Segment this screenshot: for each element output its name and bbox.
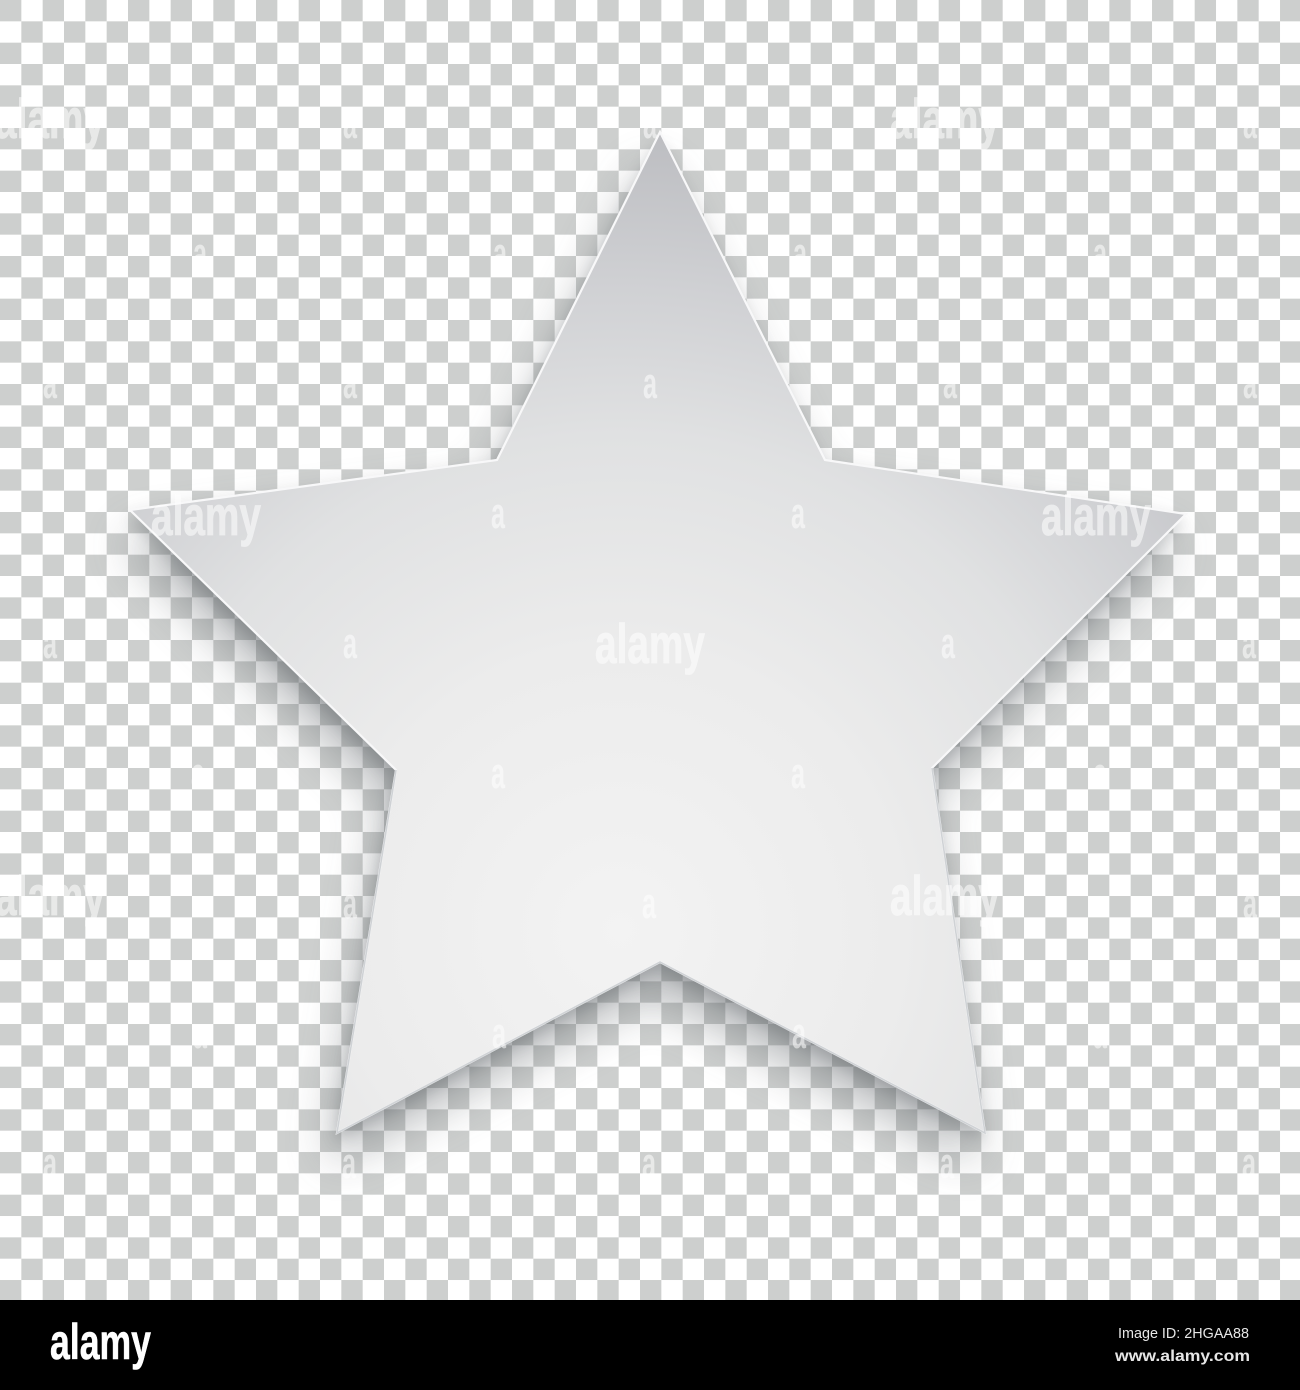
small watermark marks: a <box>491 489 505 538</box>
image id: Image ID: 2HGAA88 <box>1118 1326 1249 1342</box>
large watermarks: alamy <box>595 612 705 675</box>
website: www.alamy.com <box>1114 1348 1250 1365</box>
star soft shadow <box>122 162 1178 1163</box>
small watermark marks: a <box>343 99 357 148</box>
small watermark marks: a <box>343 879 357 928</box>
small watermark marks: a <box>940 1139 954 1188</box>
small watermark marks: a <box>343 619 357 668</box>
small watermark marks: a <box>643 359 657 408</box>
small watermark marks: a <box>791 749 805 798</box>
small watermark marks: a <box>491 749 505 798</box>
large watermarks: alamy <box>1041 484 1151 547</box>
small watermark marks: a <box>193 1009 207 1058</box>
small watermark marks: a <box>43 359 57 408</box>
large watermarks <box>0 87 1151 927</box>
small watermark marks: a <box>1243 879 1257 928</box>
small watermark marks: a <box>193 229 207 278</box>
large watermarks: alamy <box>151 484 261 547</box>
small watermark marks: a <box>343 359 357 408</box>
small watermark marks: a <box>941 619 955 668</box>
small watermark marks: a <box>1093 749 1107 798</box>
small watermark marks: a <box>342 1139 356 1188</box>
small watermark marks <box>43 99 1257 1188</box>
small watermark marks: a <box>792 1009 806 1058</box>
small watermark marks: a <box>1093 229 1107 278</box>
small watermark marks: a <box>43 1139 57 1188</box>
large watermarks: alamy <box>890 87 1000 150</box>
small watermark marks: a <box>943 359 957 408</box>
small watermark marks: a <box>791 489 805 538</box>
small watermark marks: a <box>43 619 57 668</box>
small watermark marks: a <box>493 229 507 278</box>
small watermark marks: a <box>642 1139 656 1188</box>
small watermark marks: a <box>642 879 656 928</box>
alamy logo: alamy <box>50 1314 151 1370</box>
small watermark marks: a <box>1242 619 1256 668</box>
small watermark marks: a <box>1093 1009 1107 1058</box>
small watermark marks: a <box>1243 359 1257 408</box>
star contact shadow <box>128 140 1184 1141</box>
small watermark marks: a <box>793 229 807 278</box>
small watermark marks: a <box>1242 1139 1256 1188</box>
small watermark marks: a <box>643 99 657 148</box>
paper star <box>130 132 1186 1133</box>
small watermark marks: a <box>191 749 205 798</box>
small watermark marks: a <box>492 1009 506 1058</box>
small watermark marks: a <box>1243 99 1257 148</box>
footer bar <box>0 1300 1300 1390</box>
large watermarks: alamy <box>890 864 1000 927</box>
star lower edge highlight <box>337 768 985 1133</box>
